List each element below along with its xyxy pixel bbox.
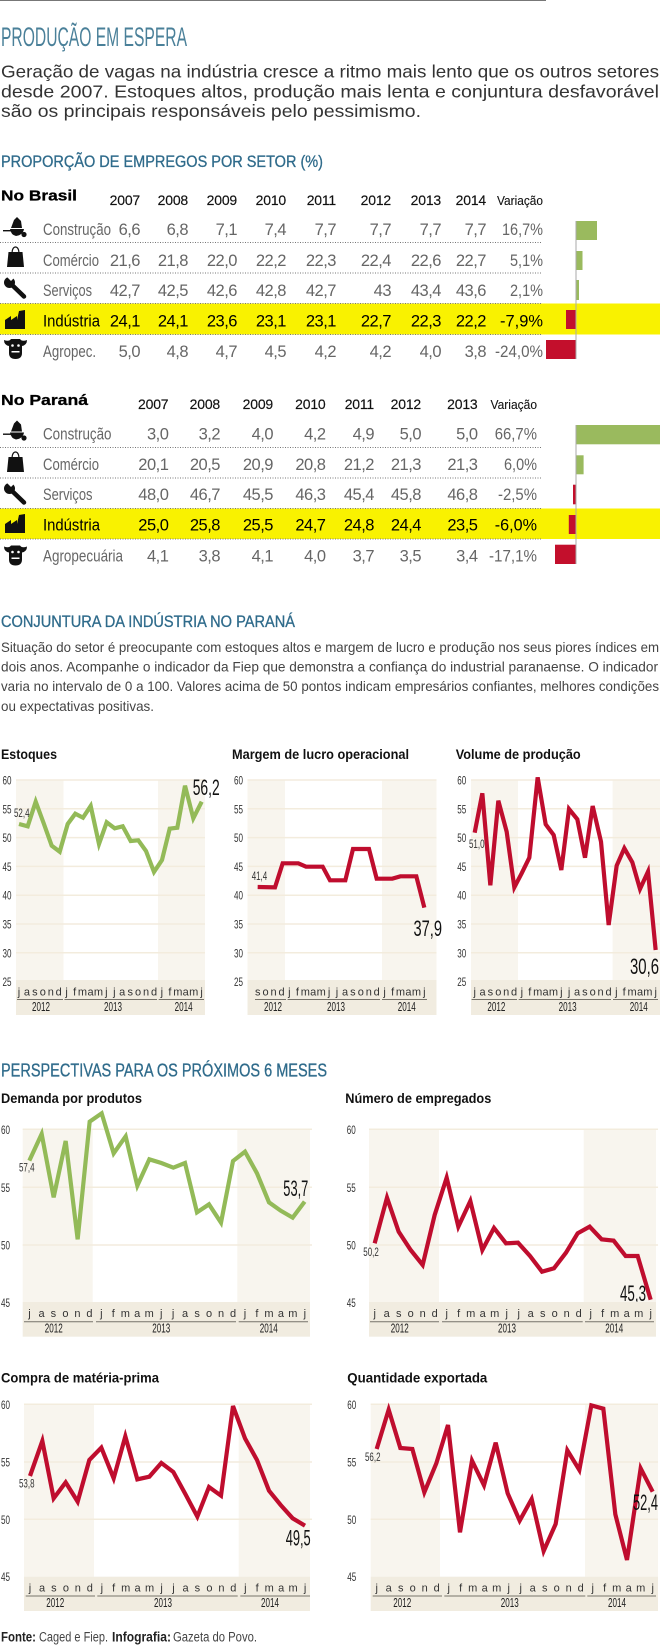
row: Agropecuária: 3,5	[400, 548, 421, 566]
column headers: 2012	[391, 396, 421, 412]
y axis labels: 60	[2, 774, 12, 788]
time axis: jasondjfmamjjasondjfmamj	[28, 1583, 306, 1595]
row: Comércio: 21,3	[447, 456, 478, 474]
footer: sources: Gazeta do Povo.	[173, 1630, 257, 1645]
time axis: 2012	[391, 1322, 409, 1336]
column headers: 2012	[361, 192, 391, 208]
row: Agropec.: 5,0	[119, 343, 140, 361]
y axis labels: 60	[234, 774, 243, 788]
row: Comércio: 6,0%	[504, 456, 537, 474]
row: Indústria: 25,5	[243, 517, 273, 535]
data line	[375, 1178, 651, 1300]
intro text: são os principais responsáveis pelo pessimismo.	[1, 101, 421, 121]
first value label: 50,2	[363, 1245, 379, 1259]
row: Serviços: Serviços	[43, 282, 92, 300]
row: Comércio: 20,5	[190, 456, 220, 474]
y axis labels: 55	[347, 1456, 357, 1470]
row: Comércio: 5,1%	[510, 252, 543, 270]
data line	[30, 1406, 305, 1526]
row: Construção: 7,1	[216, 221, 237, 239]
row: Comércio: 20,1	[138, 456, 169, 474]
y axis labels: 35	[457, 918, 467, 932]
row: Construção: 3,0	[147, 425, 169, 443]
time axis	[371, 1577, 658, 1611]
conjuntura description: dois anos. Acompanhe o indicador da Fiep que demonstra a confiança do industrial paranaense. O indicador	[1, 658, 658, 674]
time axis: 2014	[608, 1596, 626, 1610]
heading: conjuntura: CONJUNTURA DA INDÚSTRIA NO PARANÁ	[1, 612, 295, 631]
y axis labels: 50	[234, 831, 243, 845]
last value label: 49,5	[286, 1526, 311, 1551]
row: Indústria: 25,8	[190, 517, 220, 535]
row: Construção: 4,2	[304, 425, 326, 443]
time axis: 2014	[260, 1322, 278, 1336]
row: Comércio: 21,2	[344, 456, 374, 474]
footer: sources: Caged e Fiep.	[39, 1630, 108, 1645]
y axis labels: 35	[234, 918, 243, 932]
first value label: 56,2	[365, 1450, 381, 1464]
row: Comércio: 22,6	[411, 252, 441, 270]
time axis: 2014	[630, 1000, 648, 1014]
row: Agropecuária: 4,0	[304, 548, 326, 566]
row: Serviços: -2,5%	[498, 486, 537, 504]
y axis labels: 55	[347, 1181, 356, 1195]
column headers: 2014	[456, 192, 486, 208]
row: Agropec.: 4,2	[370, 343, 391, 361]
row: Indústria	[43, 313, 543, 331]
row: Serviços: 46,8	[447, 486, 478, 504]
row: Construção: Construção	[43, 425, 112, 443]
conjuntura description: ou expectativas positivas.	[1, 698, 154, 714]
row: Serviços: 42,5	[158, 282, 188, 300]
chart title: Volume de produção	[456, 747, 581, 762]
plot background	[248, 780, 436, 981]
y axis labels	[347, 1123, 356, 1310]
row: Comércio: 20,9	[243, 456, 273, 474]
y axis labels: 55	[2, 802, 12, 816]
y axis labels: 25	[457, 975, 467, 989]
row: Construção: 66,7%	[495, 425, 537, 443]
time axis: 2012	[45, 1322, 63, 1336]
line chart: Volume de produção	[456, 747, 660, 1015]
row: Indústria: -6,0%	[495, 517, 537, 535]
y axis labels: 50	[1, 1513, 10, 1527]
y axis labels	[2, 774, 12, 989]
row: Indústria: 23,5	[447, 517, 478, 535]
time axis: 2013	[104, 1000, 122, 1014]
row: Indústria: 25,0	[138, 517, 169, 535]
y axis labels: 50	[347, 1513, 357, 1527]
row: Serviços: 45,5	[243, 486, 273, 504]
plot background	[471, 780, 660, 981]
icon: cow	[4, 339, 27, 359]
icon: factory	[5, 310, 25, 329]
row: Construção: 7,7	[370, 221, 391, 239]
time axis: jasondjfmamjjasondjfmamj	[472, 987, 657, 999]
column headers	[138, 396, 537, 412]
y axis labels: 50	[457, 831, 467, 845]
row: Serviços: 46,7	[190, 486, 220, 504]
row: Serviços: 2,1%	[510, 282, 543, 300]
time axis: 2013	[501, 1596, 519, 1610]
data line	[377, 1405, 653, 1560]
row: Indústria: 23,1	[256, 313, 286, 331]
first value label: 52,4	[14, 806, 30, 820]
intro text: Geração de vagas na indústria cresce a ritmo mais lento que os outros setores	[1, 61, 659, 81]
row: Serviços: 42,7	[110, 282, 140, 300]
y axis labels: 45	[347, 1570, 357, 1584]
y axis labels: 50	[1, 1238, 10, 1252]
column headers: 2010	[295, 396, 326, 412]
row: Serviços: 43	[374, 282, 391, 300]
time axis: 2014	[605, 1322, 623, 1336]
row: Agropecuária: 4,1	[252, 548, 273, 566]
time axis	[23, 1302, 310, 1337]
y axis labels: 60	[347, 1398, 357, 1412]
row: Indústria: Indústria	[43, 313, 101, 331]
time axis	[16, 980, 205, 1015]
column headers: Variação	[497, 193, 543, 208]
icon: shopping bag	[7, 247, 24, 267]
last value label: 56,2	[193, 775, 220, 800]
icon: wheelbarrow	[3, 217, 27, 237]
row: Agropec.: Agropec.	[43, 343, 96, 361]
y axis labels	[457, 774, 467, 989]
row: Comércio: 22,2	[256, 252, 286, 270]
time axis: jasondjfmamjjasondjfmamj	[372, 1308, 652, 1320]
line chart: Estoques	[1, 747, 220, 1015]
row: Agropecuária	[43, 548, 537, 566]
y axis labels: 25	[2, 975, 12, 989]
heading: perspectivas: PERSPECTIVAS PARA OS PRÓXIMOS 6 MESES	[1, 1060, 327, 1081]
row: Serviços: 48,0	[138, 486, 169, 504]
y axis labels: 45	[347, 1296, 356, 1310]
y axis labels: 60	[1, 1398, 10, 1412]
time axis: 2014	[261, 1596, 279, 1610]
column headers: 2007	[110, 192, 140, 208]
y axis labels: 40	[457, 889, 467, 903]
row: Indústria: -7,9%	[500, 313, 543, 331]
row: Agropec.	[43, 343, 543, 361]
row: Comércio	[43, 456, 537, 474]
row: Construção: 7,4	[265, 221, 286, 239]
y axis labels: 40	[2, 889, 12, 903]
icon: cow	[4, 546, 27, 566]
row: Construção: 4,9	[353, 425, 374, 443]
row: Construção: 5,0	[456, 425, 478, 443]
row: Construção: 6,8	[167, 221, 188, 239]
chart title: Margem de lucro operacional	[232, 747, 409, 762]
row: Comércio: Comércio	[43, 252, 99, 270]
time axis: 2012	[264, 1000, 282, 1014]
time axis: 2014	[175, 1000, 193, 1014]
y axis labels: 45	[234, 860, 243, 874]
y axis labels: 35	[2, 918, 12, 932]
row: Comércio: 22,3	[306, 252, 336, 270]
time axis: 2013	[154, 1596, 172, 1610]
row: Construção: 4,0	[252, 425, 273, 443]
column headers: 2013	[411, 192, 441, 208]
row: Serviços	[43, 486, 537, 504]
table: No Paraná	[0, 392, 660, 566]
first value label: 53,8	[19, 1477, 35, 1491]
row: Serviços: 45,4	[344, 486, 374, 504]
column headers: 2009	[243, 396, 273, 412]
last value label: 53,7	[283, 1176, 308, 1201]
row: Comércio: 22,4	[361, 252, 391, 270]
row: Comércio: 22,0	[207, 252, 237, 270]
y axis labels: 60	[347, 1123, 356, 1137]
first value label: 51,0	[469, 837, 485, 851]
time axis: 2013	[152, 1322, 170, 1336]
icon: wrench	[4, 481, 24, 502]
row: Indústria: 24,4	[391, 517, 421, 535]
row: Agropecuária: 3,4	[456, 548, 478, 566]
row: Construção: 3,2	[199, 425, 220, 443]
chart title: Número de empregados	[345, 1091, 491, 1106]
y axis labels: 55	[1, 1456, 10, 1470]
y axis labels: 50	[2, 831, 12, 845]
plot background	[371, 1404, 658, 1577]
time axis: 2014	[398, 1000, 416, 1014]
row: Serviços: 43,4	[411, 282, 441, 300]
y axis labels: 55	[457, 802, 467, 816]
row: Construção	[43, 425, 537, 443]
column headers: 2008	[190, 396, 220, 412]
y axis labels	[1, 1398, 10, 1584]
time axis: 2012	[393, 1596, 411, 1610]
row: Construção: 7,7	[465, 221, 486, 239]
column headers: 2013	[447, 396, 478, 412]
row: Comércio	[43, 252, 543, 270]
row: Comércio: 21,6	[110, 252, 140, 270]
column headers: 2011	[307, 192, 336, 208]
table heading: No Brasil: No Brasil	[1, 188, 77, 205]
time axis	[369, 1302, 656, 1337]
row: Agropec.: 4,7	[216, 343, 237, 361]
y axis labels: 55	[234, 802, 243, 816]
plot background	[16, 780, 205, 981]
row: Indústria: 24,1	[158, 313, 188, 331]
row: Comércio: 20,8	[295, 456, 326, 474]
data line	[475, 777, 656, 950]
time axis: 2013	[498, 1322, 516, 1336]
first value label: 57,4	[19, 1161, 35, 1175]
time axis: sondjfmamjjasondjfmamj	[255, 987, 426, 999]
line chart: Número de empregados	[345, 1091, 658, 1337]
column headers: 2008	[158, 192, 188, 208]
row: Indústria: 22,3	[411, 313, 441, 331]
bar chart: variation Brasil	[546, 221, 597, 359]
chart title: Demanda por produtos	[1, 1091, 142, 1106]
column headers: Variação	[490, 397, 537, 412]
y axis labels	[1, 1123, 10, 1310]
row: Agropecuária: -17,1%	[489, 548, 537, 566]
y axis labels: 45	[1, 1296, 10, 1310]
data line	[29, 1113, 305, 1239]
row: Construção: 16,7%	[502, 221, 543, 239]
line chart: Margem de lucro operacional	[232, 747, 442, 1015]
row: Indústria: Indústria	[43, 517, 101, 535]
row: Agropec.: 4,0	[420, 343, 441, 361]
row: Construção: 7,7	[420, 221, 441, 239]
table: No Brasil	[0, 188, 660, 361]
row: Comércio: 21,8	[158, 252, 188, 270]
intro text: desde 2007. Estoques altos, produção mais lenta e conjuntura desfavorável	[1, 81, 659, 101]
plot background	[23, 1129, 312, 1302]
y axis labels: 25	[234, 975, 243, 989]
last value label: 37,9	[414, 916, 442, 941]
row: Construção: 5,0	[400, 425, 421, 443]
y axis labels: 40	[234, 889, 243, 903]
y axis labels: 60	[1, 1123, 10, 1137]
row: Serviços: 42,8	[256, 282, 286, 300]
row: Indústria: 22,7	[361, 313, 391, 331]
footer: sources	[1, 1630, 257, 1645]
column headers: 2010	[256, 192, 286, 208]
row: Construção: 6,6	[119, 221, 140, 239]
title: PRODUÇÃO EM ESPERA	[1, 21, 187, 52]
row: Agropecuária: 3,8	[199, 548, 220, 566]
heading: employment share by sector: PROPORÇÃO DE EMPREGOS POR SETOR (%)	[1, 151, 323, 171]
time axis: 2012	[32, 1000, 50, 1014]
row: Agropec.: 4,2	[315, 343, 336, 361]
time axis: jasondjfmamjjasondjfmamj	[374, 1583, 654, 1595]
time axis: jasondjfmamjjasondjfmamj	[17, 987, 203, 999]
row: Serviços: 43,6	[456, 282, 486, 300]
footer: sources: Fonte:	[1, 1630, 36, 1645]
row: Agropec.: 4,5	[265, 343, 286, 361]
row: Comércio: Comércio	[43, 456, 99, 474]
y axis labels	[234, 774, 243, 989]
data line	[19, 786, 202, 872]
icon: factory	[5, 514, 25, 533]
intro text	[1, 61, 659, 121]
row: Agropecuária: Agropecuária	[43, 548, 124, 566]
row: Serviços: 42,7	[306, 282, 336, 300]
footer: sources: Infografia:	[112, 1630, 171, 1645]
y axis labels: 30	[457, 946, 467, 960]
chart title: Compra de matéria-prima	[1, 1371, 159, 1386]
y axis labels: 45	[2, 860, 12, 874]
icon: wrench	[4, 275, 24, 296]
data line	[258, 849, 424, 908]
line chart: Quantidade exportada	[347, 1371, 658, 1611]
time axis: 2012	[46, 1596, 64, 1610]
row: Serviços: Serviços	[43, 486, 92, 504]
icon: shopping bag	[7, 452, 24, 472]
bar chart: variation Paraná	[555, 425, 660, 564]
y axis labels: 30	[234, 946, 243, 960]
time axis	[471, 980, 660, 1015]
chart title: Estoques	[1, 747, 57, 762]
conjuntura description	[1, 639, 659, 714]
table heading: No Paraná: No Paraná	[1, 392, 89, 409]
column headers: 2009	[207, 192, 237, 208]
row: Agropecuária: 4,1	[147, 548, 169, 566]
row: Indústria: 24,7	[295, 517, 326, 535]
time axis	[248, 980, 436, 1015]
row: Agropecuária: 3,7	[353, 548, 374, 566]
row: Indústria: 23,1	[306, 313, 336, 331]
y axis labels: 45	[457, 860, 467, 874]
line chart: Compra de matéria-prima	[1, 1371, 312, 1611]
y axis labels	[347, 1398, 357, 1584]
time axis	[24, 1577, 310, 1611]
row: Agropec.: 4,8	[167, 343, 188, 361]
plot background	[369, 1129, 658, 1302]
row: Construção: 7,7	[315, 221, 336, 239]
row: Serviços: 42,6	[207, 282, 237, 300]
row: Indústria: 22,2	[456, 313, 486, 331]
row: Agropec.: -24,0%	[495, 343, 543, 361]
time axis: 2013	[327, 1000, 345, 1014]
column headers: 2011	[345, 396, 374, 412]
row: Serviços: 45,8	[391, 486, 421, 504]
row: Comércio: 22,7	[456, 252, 486, 270]
y axis labels: 30	[2, 946, 12, 960]
first value label: 41,4	[252, 869, 267, 883]
row: Comércio: 21,3	[391, 456, 421, 474]
y axis labels: 55	[1, 1181, 10, 1195]
row: Indústria: 23,6	[207, 313, 237, 331]
row: Agropec.: 3,8	[465, 343, 486, 361]
row: Indústria: 24,8	[344, 517, 374, 535]
plot background	[24, 1404, 312, 1577]
row: Indústria: 24,1	[110, 313, 140, 331]
line chart: Demanda por produtos	[1, 1091, 312, 1337]
icon: wheelbarrow	[3, 420, 27, 441]
row: Construção	[43, 221, 543, 239]
y axis labels: 50	[347, 1238, 356, 1252]
time axis: 2013	[559, 1000, 577, 1014]
column headers	[110, 192, 543, 208]
column headers: 2007	[138, 396, 169, 412]
time axis: jasondjfmamjjasondjfmamj	[27, 1308, 306, 1320]
row: Indústria	[43, 517, 537, 535]
y axis labels: 45	[1, 1570, 10, 1584]
chart title: Quantidade exportada	[347, 1371, 488, 1386]
y axis labels: 60	[457, 774, 467, 788]
time axis: 2012	[487, 1000, 505, 1014]
row: Serviços	[43, 282, 543, 300]
row: Serviços: 46,3	[295, 486, 326, 504]
row: Construção: Construção	[43, 221, 111, 239]
